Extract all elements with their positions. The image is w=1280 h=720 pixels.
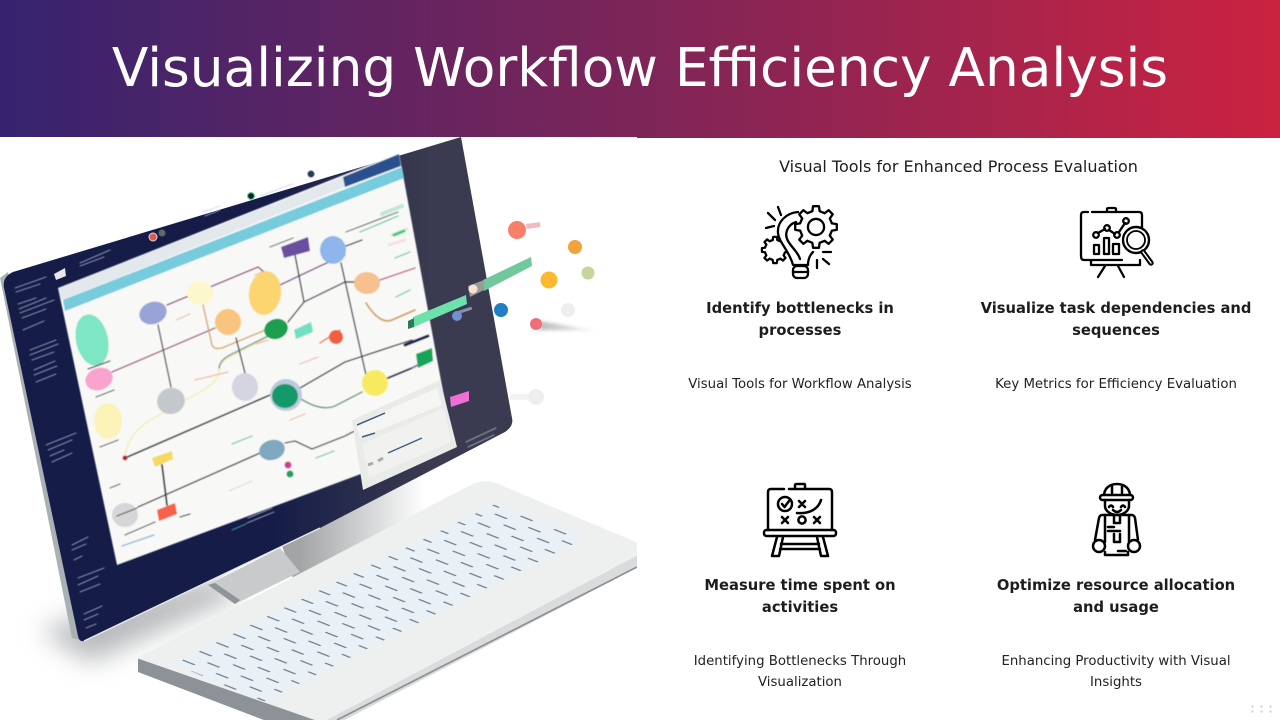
card description: Key Metrics for Efficiency Evaluation [995,377,1237,392]
header status dots [54,170,314,280]
card description [1001,654,1231,690]
floating pink tab [450,391,469,407]
icon: light bulb with gears [760,205,838,280]
card description: Insights [1090,675,1142,690]
icon: strategy board [762,482,838,558]
header banner [0,0,1280,138]
card heading [704,577,896,616]
floating mint bar [408,257,532,329]
screen top bars [58,177,345,300]
card heading [706,300,894,339]
screen [58,153,452,565]
card heading: Identify bottlenecks in [706,300,894,317]
card heading: Optimize resource allocation [997,577,1235,594]
card: identify bottlenecks [688,205,912,392]
monitor shadow [40,578,245,662]
bezel text marks [15,184,496,628]
top surface [138,482,637,720]
right side face [322,555,637,720]
card heading [980,300,1251,339]
connector lines [112,240,432,507]
shadow on desk behind keyboard [280,470,430,590]
card: task dependencies [980,206,1251,392]
small screen labels [88,206,410,546]
card: measure time [694,482,906,690]
card description: Visual Tools for Workflow Analysis [688,377,912,392]
card: optimize resources [997,482,1235,690]
card heading [997,577,1235,616]
card description: Identifying Bottlenecks Through [694,654,906,669]
card heading: and usage [1073,599,1159,616]
icon: presentation board with magnifier [1080,206,1154,278]
card description: Enhancing Productivity with Visual [1001,654,1231,669]
card heading: Measure time spent on [704,577,896,594]
left side face [138,658,330,720]
bezel [4,137,512,641]
keys [172,503,587,702]
floating data dots [452,221,600,405]
illustration: desktop computer showing workflow diagram [0,137,637,720]
corner watermark dots [1248,704,1276,713]
keyboard [138,482,637,720]
silver side edge [0,272,84,641]
bezel lower highlight [84,528,320,641]
icon: worker with hard hat [1092,482,1142,556]
card description: Visualization [758,675,842,690]
title: Visualizing Workflow Efficiency Analysis [112,37,1168,99]
card heading: sequences [1072,322,1160,339]
monitor [0,137,512,641]
workflow nodes [71,236,433,527]
card heading: Visualize task dependencies and [981,300,1251,317]
card description [694,654,906,690]
section subheading: Visual Tools for Enhanced Process Evaluation [779,157,1138,176]
monitor stand [208,548,300,604]
card heading: processes [759,322,841,339]
overlay analytics panel [352,380,457,490]
card heading: activities [762,599,838,616]
